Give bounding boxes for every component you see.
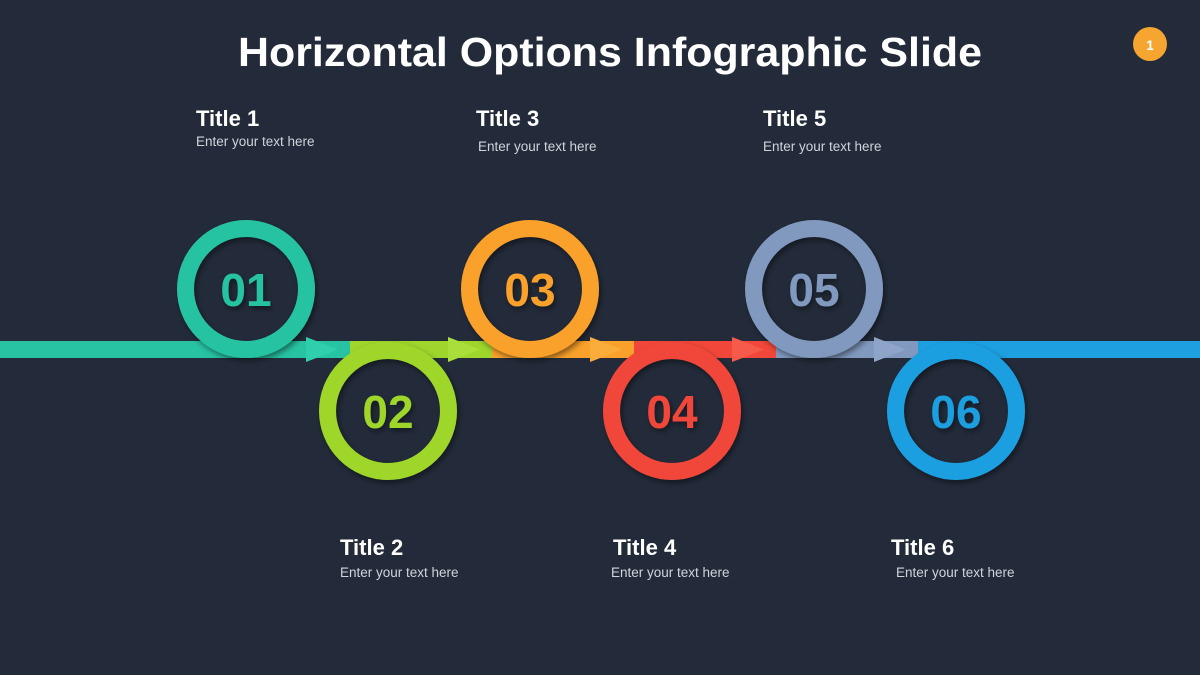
circle 05 [754,228,874,350]
text 4 [611,535,730,580]
text 6: Enter your text here [896,565,1015,580]
text 5 [763,106,882,154]
circle 03 [470,228,590,350]
circle 02 [328,350,448,472]
text 6: Title 6 [891,535,954,560]
text 4: Title 4 [613,535,677,560]
circle 01 [186,228,306,350]
page badge [1133,27,1167,61]
arrowheads [306,337,906,362]
text 1: Title 1 [196,106,259,131]
text 6 [891,535,1015,580]
text 3: Enter your text here [478,139,597,154]
circle 04 [612,350,732,472]
circle 04: 04 [646,386,698,438]
text 3: Title 3 [476,106,539,131]
timeline band [0,341,1200,358]
text 4: Enter your text here [611,565,730,580]
text 3 [476,106,597,154]
circle 05: 05 [788,264,840,316]
circle 06: 06 [930,386,982,438]
circle 06 [896,350,1016,472]
text 5: Title 5 [763,106,826,131]
circle 02: 02 [362,386,414,438]
title: Horizontal Options Infographic Slide [238,29,982,75]
circle 01: 01 [220,264,272,316]
text 2 [340,535,459,580]
circle 03: 03 [504,264,556,316]
page badge: 1 [1146,37,1154,53]
text 1 [196,106,315,149]
text 5: Enter your text here [763,139,882,154]
text 1: Enter your text here [196,134,315,149]
text 2: Title 2 [340,535,403,560]
text 2: Enter your text here [340,565,459,580]
